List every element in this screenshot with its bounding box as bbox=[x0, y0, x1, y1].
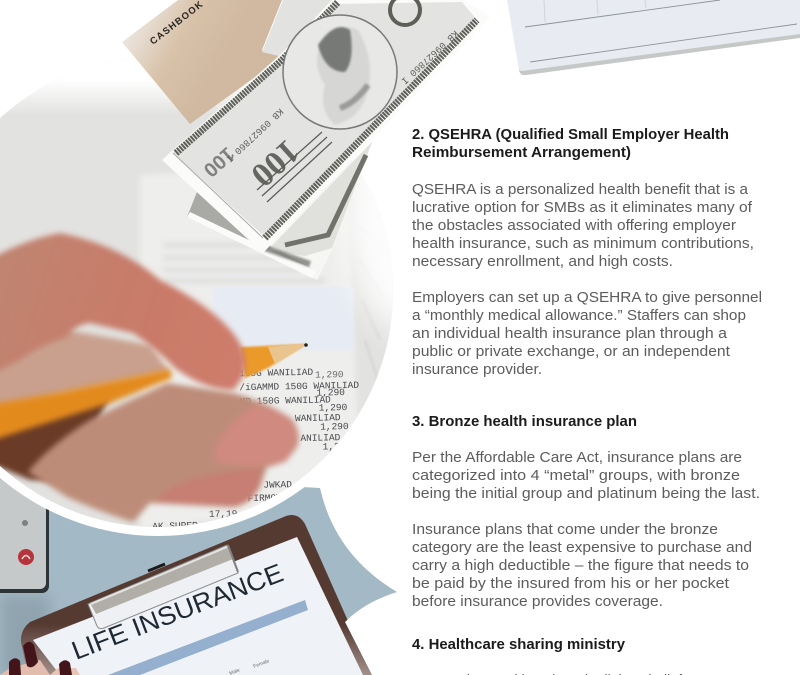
paragraph: metal groups: Per the Affordable Care Act, insurance plans are bbox=[412, 450, 742, 466]
paragraph: QSEHRA employers: Employers can set up a QSEHRA to give personnel bbox=[412, 290, 762, 306]
paragraph: metal groups: being the initial group and platinum being the last. bbox=[412, 486, 760, 502]
fingers with nails bbox=[0, 660, 50, 675]
paragraph: metal groups: categorized into 4 “metal” groups, with bronze bbox=[412, 468, 740, 484]
illustration: clipboard: Female bbox=[253, 658, 270, 670]
seal ring bbox=[390, 0, 420, 25]
bill denomination and serial: 100 bbox=[199, 142, 238, 181]
torn paper scrap bbox=[53, 343, 170, 385]
paragraph: bronze deductible: Insurance plans that come under the bronze bbox=[412, 522, 718, 538]
cashbook label: CASHBOOK bbox=[148, 0, 206, 47]
paragraph: bronze deductible bbox=[412, 522, 752, 610]
clipboard clip bbox=[88, 545, 238, 629]
paragraph: bronze deductible: before insurance provides coverage. bbox=[412, 594, 663, 610]
upper pale bill bbox=[262, 0, 340, 57]
receipt: 1,290 bbox=[319, 402, 348, 414]
receipt: WANILIAD bbox=[295, 412, 341, 424]
receipt: AK SUPER bbox=[152, 520, 198, 532]
white fade on circle edge bbox=[344, 160, 393, 331]
paragraph: metal groups bbox=[412, 450, 760, 502]
receipt: 1,290 bbox=[316, 387, 345, 399]
text block: Healthcare sharing ministry section bbox=[412, 637, 683, 675]
band behind pencil bbox=[0, 330, 170, 415]
heading: Healthcare sharing ministry: 4. Healthcare sharing ministry bbox=[412, 637, 625, 653]
receipt: 1,290 bbox=[315, 369, 344, 381]
paragraph: QSEHRA description: health insurance, such as minimum contributions, bbox=[412, 236, 754, 252]
main bill: KB 09627860 I bbox=[399, 28, 460, 86]
paragraph: bronze deductible: carry a high deductible – the figure that needs to bbox=[412, 558, 749, 574]
receipt: 17,19 bbox=[209, 508, 238, 520]
paragraph: QSEHRA description: the obstacles associated with offering employer bbox=[412, 218, 736, 234]
receipt: 1,290 bbox=[320, 421, 349, 433]
main bill bbox=[162, 0, 490, 253]
paragraph: QSEHRA employers bbox=[412, 290, 762, 378]
receipt: MD 150G WANILIAD bbox=[239, 394, 331, 407]
receipt: 1,290 bbox=[322, 441, 351, 453]
heading: QSEHRA: 2. QSEHRA (Qualified Small Employer Health bbox=[412, 127, 729, 143]
receipt: 150G WANILIAD bbox=[239, 367, 314, 379]
text block: Bronze plan section bbox=[412, 414, 760, 610]
lower hand and thumb bbox=[28, 383, 299, 522]
shadow under hand bbox=[0, 395, 110, 480]
heading: QSEHRA: Reimbursement Arrangement) bbox=[412, 145, 631, 161]
portrait medallion bbox=[283, 15, 397, 129]
lower bills bbox=[187, 140, 373, 280]
paragraph: QSEHRA employers: public or private exchange, or an independent bbox=[412, 344, 730, 360]
receipt bbox=[140, 165, 385, 532]
icon: phone bbox=[0, 470, 49, 593]
banner lines bbox=[257, 132, 332, 202]
heading: Bronze plan: 3. Bronze health insurance plan bbox=[412, 414, 637, 430]
receipt: ANILIAD bbox=[300, 432, 341, 444]
paragraph: bronze deductible: category are the least expensive to purchase and bbox=[412, 540, 752, 556]
paragraph: QSEHRA description bbox=[412, 182, 754, 270]
text block: QSEHRA section bbox=[412, 127, 762, 378]
main bill: 100 bbox=[244, 132, 306, 194]
illustration: white ring around receipt circle bbox=[0, 48, 402, 536]
top finger bbox=[0, 233, 246, 390]
pencil shaft bbox=[0, 369, 172, 444]
paragraph: QSEHRA description: necessary enrollment, and high costs. bbox=[412, 254, 673, 270]
illustration: blue desk background with phone and clipboard bbox=[0, 460, 400, 675]
pencil tip bbox=[240, 343, 308, 378]
main bill: KB 09627860 I bbox=[224, 106, 285, 164]
receipt: JWKAD bbox=[263, 479, 292, 491]
paragraph: QSEHRA employers: a “monthly medical allowance.” Staffers can shop bbox=[412, 308, 746, 324]
paragraph: bronze deductible: be paid by the insured from his or her pocket bbox=[412, 576, 729, 592]
illustration: stack of hundred dollar bills bbox=[162, 0, 490, 280]
receipt: FIRMOWO bbox=[248, 492, 288, 504]
paragraph: QSEHRA employers: an individual health insurance plan through a bbox=[412, 326, 728, 342]
paragraph: QSEHRA description: lucrative option for SMBs as it eliminates many of bbox=[412, 200, 753, 216]
illustration: cashbook bbox=[122, 0, 283, 124]
illustration: clipboard: LIFE INSURANCE bbox=[67, 557, 287, 666]
paragraph: QSEHRA description: QSEHRA is a personalized health benefit that is a bbox=[412, 182, 749, 198]
illustration: clipboard bbox=[0, 515, 372, 675]
hand bbox=[0, 233, 299, 522]
heading: QSEHRA bbox=[412, 127, 729, 161]
illustration: top-right paper form bbox=[507, 0, 800, 75]
illustration: hand writing on a receipt in a circle bbox=[0, 82, 393, 527]
receipt: /iGAMMD 150G WANILIAD bbox=[239, 380, 359, 393]
paragraph: QSEHRA employers: insurance provider. bbox=[412, 362, 542, 378]
